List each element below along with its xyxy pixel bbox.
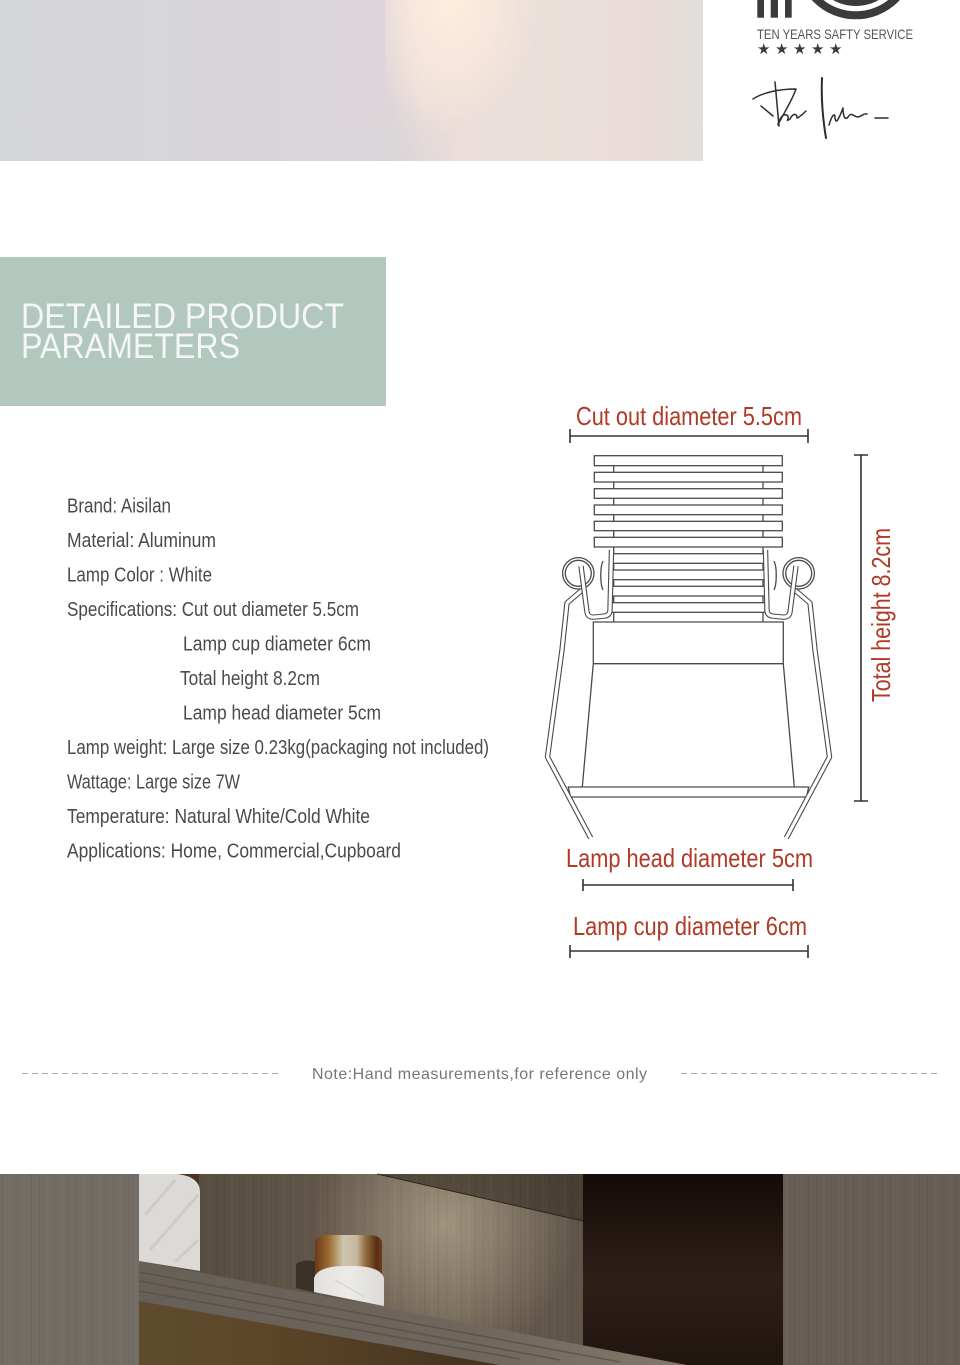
specification list: Lamp weight: Large size 0.23kg(packaging not included)	[67, 737, 489, 759]
heading text: PARAMETERS	[21, 327, 240, 366]
bottom photo: marble lamps on wooden shelf	[0, 1174, 960, 1365]
right wood panel	[783, 1174, 960, 1365]
specification list: Lamp Color : White	[67, 564, 212, 586]
cabinet below shelf	[139, 1301, 500, 1365]
icon: five stars: ★	[793, 41, 806, 58]
specification list: Wattage: Large size 7W	[67, 772, 240, 794]
left wood panel	[0, 1174, 139, 1365]
signature	[753, 78, 888, 138]
specification list: Specifications: Cut out diameter 5.5cm	[67, 599, 359, 621]
dimension: lamp cup diameter	[570, 911, 808, 958]
specification list: Lamp head diameter 5cm	[183, 702, 381, 724]
hero photo: blurred wall with warm light	[0, 0, 703, 161]
specification list: Total height 8.2cm	[180, 668, 320, 690]
dimension: cut out diameter: Cut out diameter 5.5cm	[576, 401, 802, 431]
icon: five stars: ★	[811, 41, 824, 58]
icon: five stars: ★	[829, 41, 842, 58]
dimension: total height	[854, 455, 896, 801]
right spring clip	[766, 550, 830, 838]
lamp cup body	[582, 622, 794, 787]
dimension: lamp head diameter	[566, 843, 813, 891]
icon: five stars: ★	[775, 41, 788, 58]
dimension: lamp head diameter: Lamp head diameter 5cm	[566, 843, 813, 873]
specification list: Brand: Aisilan	[67, 496, 171, 518]
dark recess	[583, 1174, 783, 1365]
specification list: Material: Aluminum	[67, 530, 216, 552]
specification list: Lamp cup diameter 6cm	[183, 634, 371, 656]
left spring clip	[548, 550, 612, 838]
dimension: total height: Total height 8.2cm	[866, 528, 896, 702]
section heading panel	[0, 257, 386, 406]
main lamp	[314, 1235, 384, 1306]
lower heat sink fins	[612, 554, 765, 622]
icon: five stars	[757, 41, 842, 58]
heading text: DETAILED PRODUCT	[21, 297, 344, 336]
lamp flange	[568, 787, 809, 797]
heading text	[21, 297, 344, 366]
shadow behind main lamp	[296, 1260, 316, 1293]
lamp line drawing	[548, 456, 830, 838]
dimension: cut out diameter	[570, 401, 808, 443]
upper marble lamp	[139, 1174, 200, 1271]
specification list: Temperature: Natural White/Cold White	[67, 806, 370, 828]
icon: five stars: ★	[757, 41, 770, 58]
dimension: lamp cup diameter: Lamp cup diameter 6cm	[573, 911, 807, 941]
upper heat sink fins	[594, 456, 782, 554]
specification list	[67, 496, 489, 862]
measurement note: Note:Hand measurements,for reference only	[312, 1066, 647, 1083]
wooden shelf	[139, 1261, 687, 1365]
wood wall	[139, 1174, 583, 1365]
specification list: Applications: Home, Commercial,Cupboard	[67, 840, 401, 862]
warranty logo: ten years safety service: TEN YEARS SAFTY SERVICE	[757, 26, 913, 42]
warranty logo: ten years safety service	[757, 0, 913, 58]
